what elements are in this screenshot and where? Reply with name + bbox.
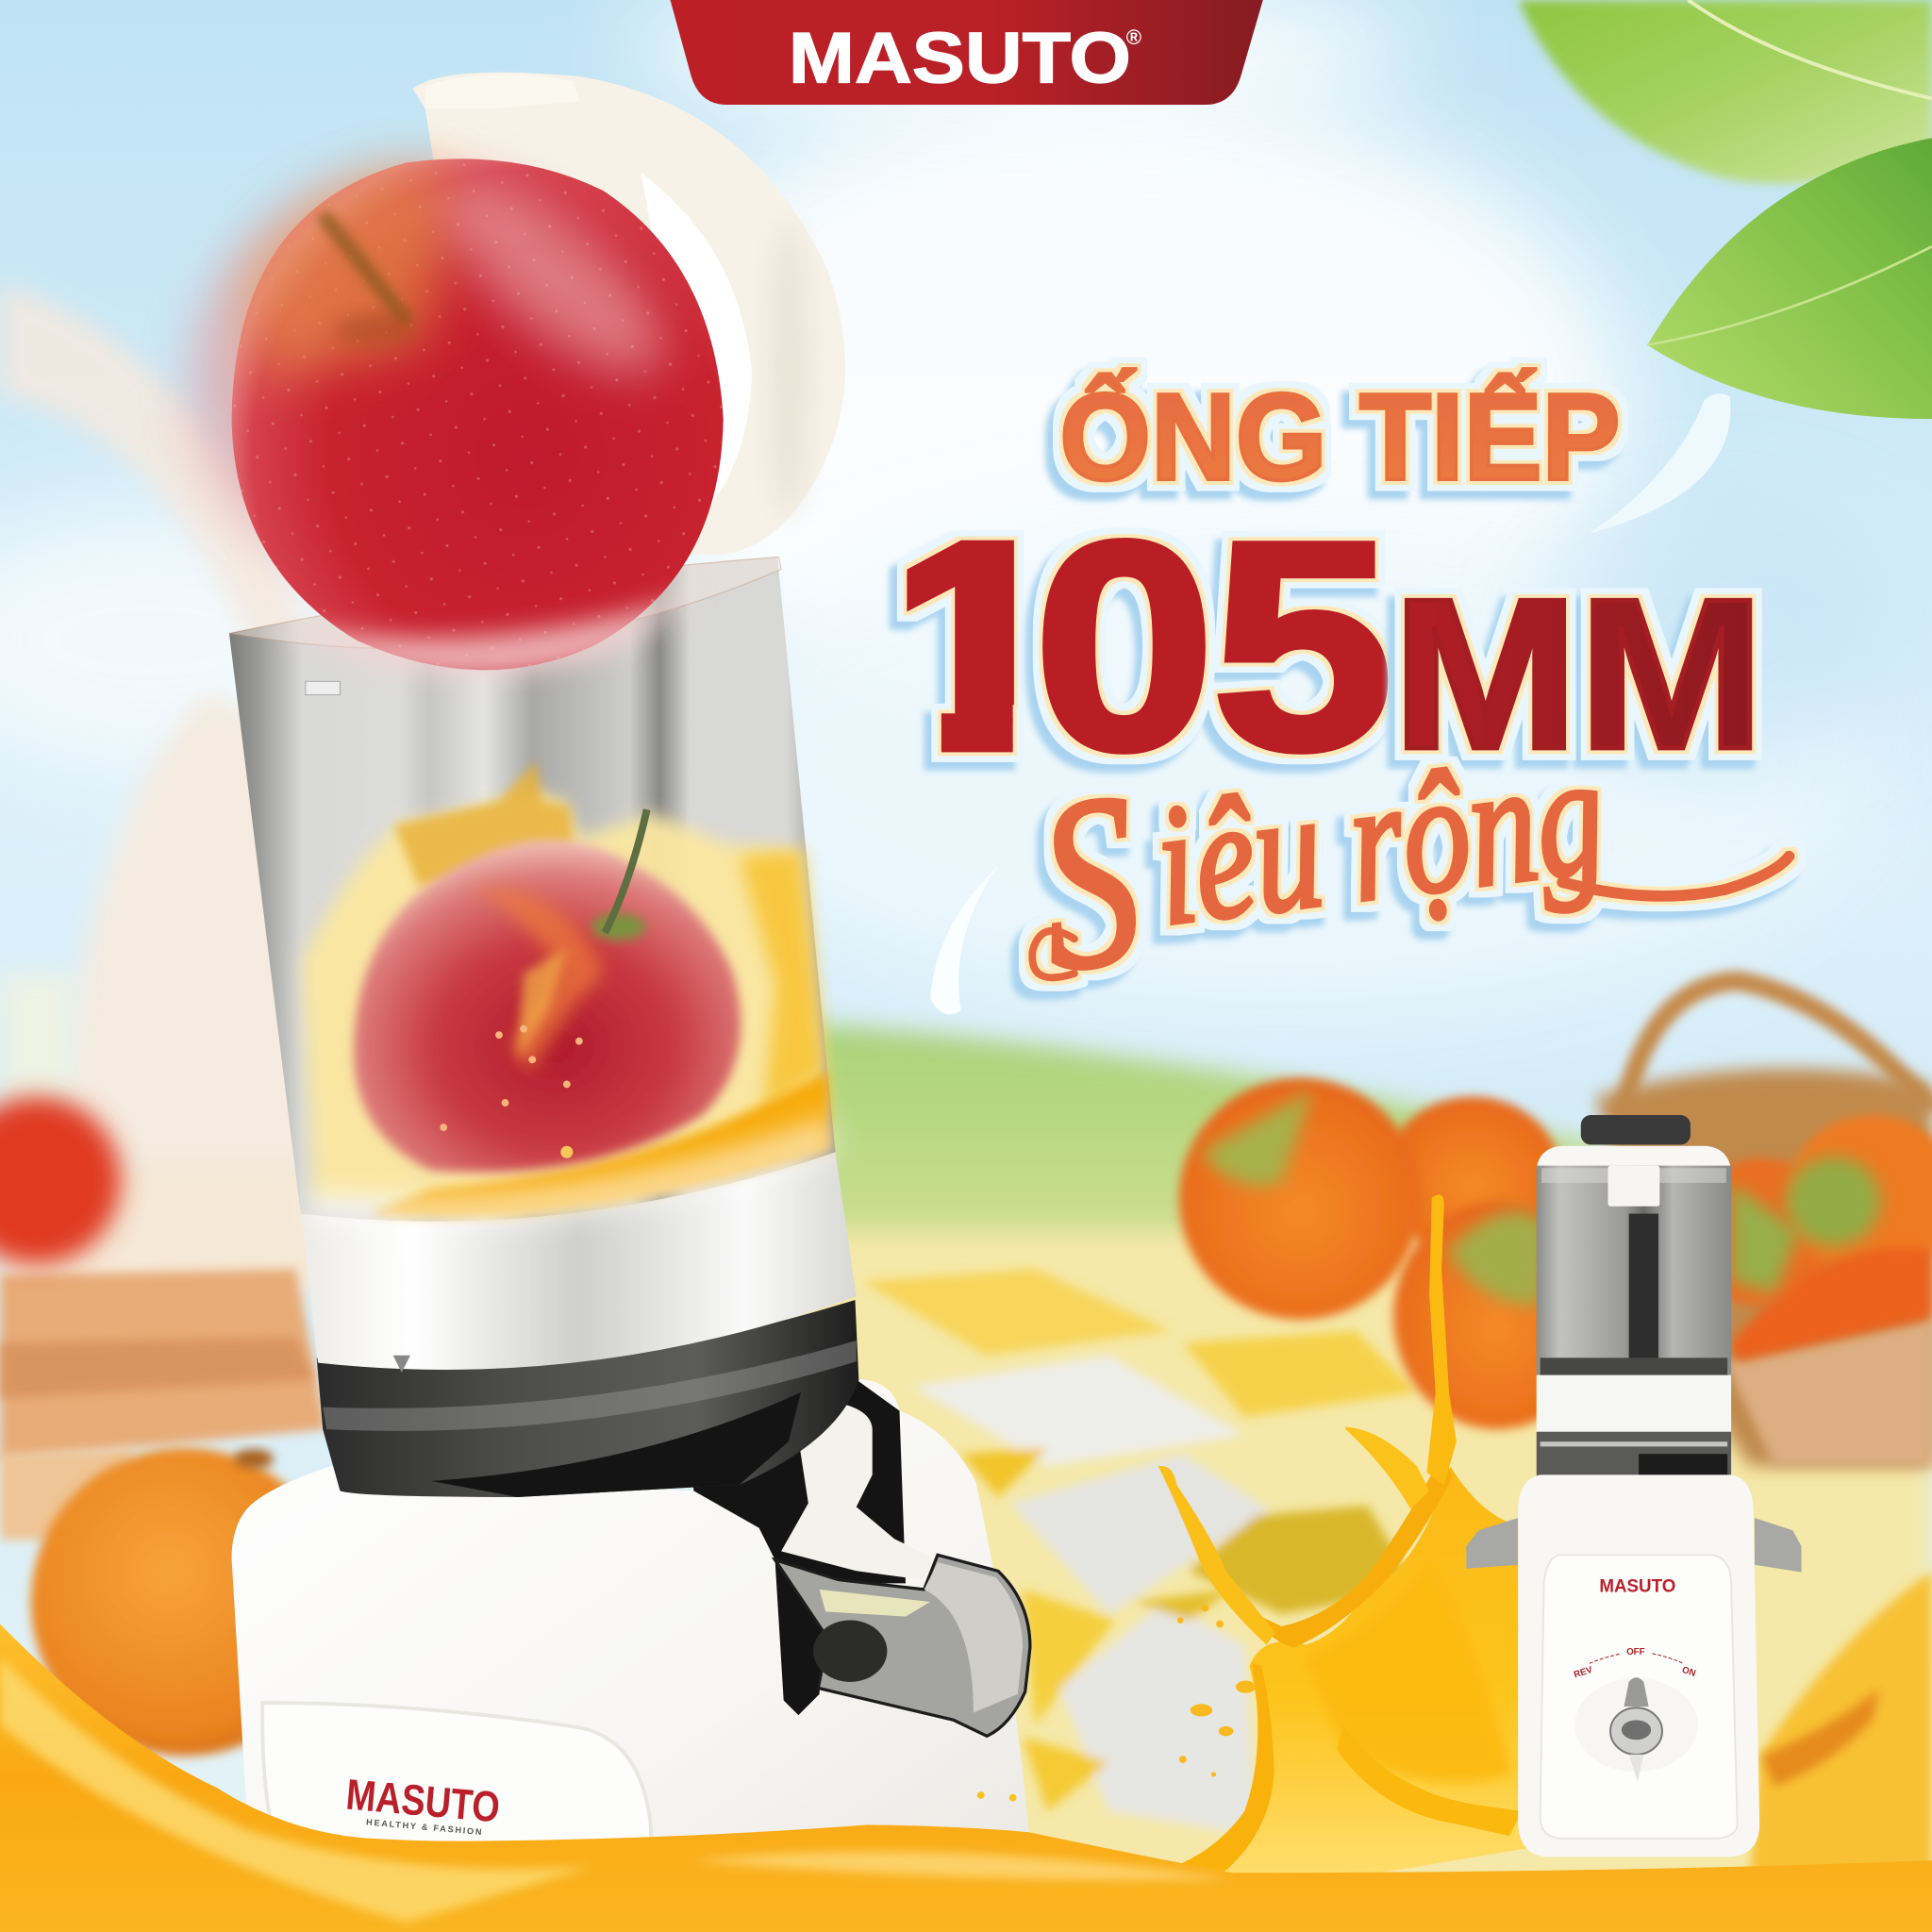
main juicer — [229, 73, 1030, 1932]
headline: Ống tiếp: ỐNG TIẾP — [1059, 368, 1621, 506]
headline: script Siêu rộng — [1025, 683, 1789, 1024]
arrow mark — [393, 1356, 410, 1373]
script tail swash — [1562, 857, 1789, 896]
headline: 105: 5 — [1212, 480, 1393, 810]
hero apple falling — [191, 151, 724, 676]
white flap — [781, 1404, 938, 1579]
dial labels — [1573, 1647, 1697, 1680]
base logo: MASUTO — [344, 1771, 502, 1832]
headline: script Siêu rộng: S — [1025, 741, 1154, 1024]
small juicer collar — [1537, 1375, 1731, 1434]
small juicer cap — [1537, 1115, 1731, 1171]
headline: script Siêu rộng: iêu — [1146, 753, 1332, 961]
small juicer product — [1466, 1115, 1802, 1857]
small juicer jar — [1537, 1166, 1731, 1377]
measuring mark — [306, 681, 340, 695]
header logo: MASUTO — [789, 19, 1131, 99]
headline: 105: 1 — [877, 481, 1074, 811]
juicer base — [232, 1379, 1029, 1932]
mango slice right — [1750, 1571, 1932, 1885]
base tagline: HEALTHY & FASHION — [366, 1817, 482, 1837]
headline: MM: MM — [1392, 555, 1764, 794]
dial labels: REV — [1573, 1665, 1594, 1680]
apple in jar — [354, 809, 741, 1173]
background basket and persimmons — [1179, 981, 1932, 1466]
juice wave bottom — [0, 1624, 1932, 1932]
juice swirl in jar — [302, 761, 830, 1217]
small juicer left handle — [1466, 1518, 1518, 1569]
dark ring lower — [431, 1392, 801, 1497]
small juicer logo: MASUTO — [1599, 1576, 1675, 1597]
juicer lid — [413, 73, 845, 567]
small juicer body — [1518, 1474, 1759, 1857]
dial labels: OFF — [1626, 1647, 1645, 1657]
header registered mark: ® — [1126, 25, 1142, 49]
header tab — [671, 0, 1263, 105]
headline: 105: 0 — [1034, 480, 1215, 810]
background orange fruit — [31, 1448, 339, 1756]
headline: script Siêu rộng: rộng — [1305, 718, 1614, 942]
background left blur: cloth, arc and bread — [0, 283, 333, 1541]
small juicer filter ring — [1537, 1432, 1731, 1478]
background checkered tablecloth — [789, 1232, 1932, 1932]
dark filter ring — [317, 1300, 858, 1497]
spout cup — [775, 1555, 1030, 1736]
small juicer right handle — [1755, 1518, 1802, 1573]
leaf lower — [1647, 138, 1932, 419]
spout chamber — [690, 1379, 1030, 1736]
headline: 105 — [885, 528, 1391, 776]
juicer jar — [229, 557, 838, 1227]
white collar band — [301, 1152, 857, 1370]
juice splash — [1158, 1194, 1528, 1885]
script S loop flourish — [1032, 931, 1074, 977]
decorative white swooshes — [930, 393, 1730, 1014]
background grass field — [789, 1023, 1932, 1306]
dial labels: ON — [1681, 1665, 1697, 1679]
leaf top — [1518, 0, 1932, 184]
small juicer panel — [1541, 1555, 1738, 1839]
ring highlight — [323, 1341, 857, 1431]
chrome dial knob — [1574, 1677, 1698, 1782]
